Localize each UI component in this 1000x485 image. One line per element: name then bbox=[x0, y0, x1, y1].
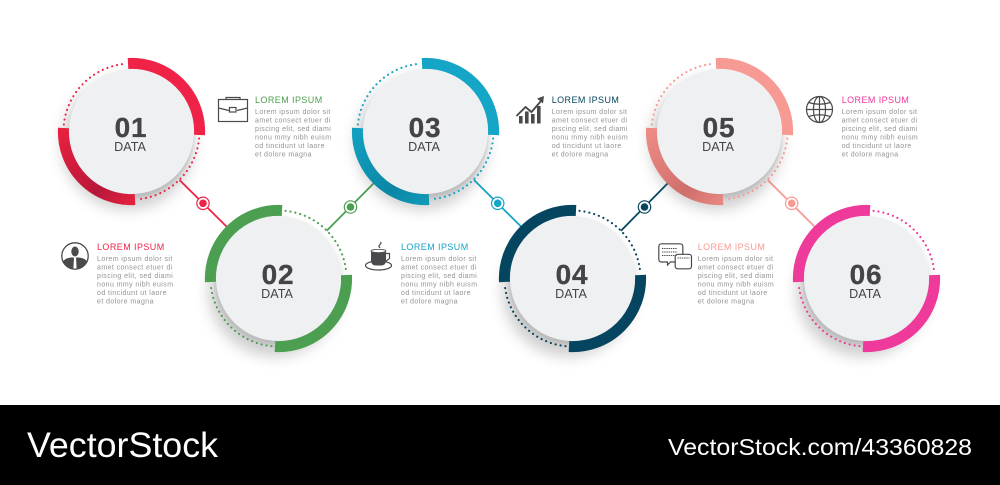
text block: step 01: piscing elit, sed diami bbox=[255, 126, 331, 133]
text block: step 04: amet consect etuer di bbox=[401, 264, 477, 272]
text block: step 03: amet consect etuer di bbox=[552, 118, 627, 125]
text block: step 03: Lorem ipsum dolor sit bbox=[552, 109, 627, 116]
circle step 03: DATA bbox=[408, 140, 440, 154]
text block: step 06: et dolore magna bbox=[698, 298, 755, 306]
icon: chat bubbles bbox=[659, 244, 692, 269]
text block: step 05 bbox=[842, 95, 918, 159]
circle step 06 bbox=[796, 210, 935, 356]
text block: step 02: Lorem ipsum dolor sit bbox=[97, 256, 173, 263]
text block: step 02: piscing elit, sed diami bbox=[97, 273, 173, 280]
circle step 01 bbox=[62, 63, 200, 209]
icon: coffee cup bbox=[366, 242, 392, 270]
circle step 02: DATA bbox=[261, 287, 293, 301]
connector: 05 to 06 bbox=[768, 180, 815, 227]
icon: globe bbox=[806, 96, 832, 122]
text block: step 06: amet consect etuer di bbox=[698, 264, 773, 272]
text block: step 06: Lorem ipsum dolor sit bbox=[698, 256, 773, 263]
circle step 02: 02 bbox=[262, 259, 294, 290]
text block: step 03 bbox=[552, 95, 628, 159]
text block: step 05: od tincidunt ut laore bbox=[842, 143, 912, 150]
text block: step 04: od tincidunt ut laore bbox=[401, 290, 471, 297]
connector: 01 to 02 bbox=[180, 180, 227, 227]
circle step 06: 06 bbox=[850, 259, 882, 290]
text block: step 03: od tincidunt ut laore bbox=[552, 143, 622, 150]
text block: step 02: od tincidunt ut laore bbox=[97, 290, 167, 297]
text block: step 04: LOREM IPSUM bbox=[401, 242, 469, 252]
text block: step 02 bbox=[97, 242, 173, 306]
text block: step 05: LOREM IPSUM bbox=[842, 95, 909, 105]
text block: step 04: nonu mmy nibh euism bbox=[401, 282, 477, 288]
text block: step 04: et dolore magna bbox=[401, 298, 458, 306]
connector: 03 to 04 bbox=[474, 180, 522, 227]
circle step 02 bbox=[208, 210, 347, 356]
icon: briefcase bbox=[218, 98, 248, 122]
circle step 05: 05 bbox=[703, 112, 735, 143]
circle step 03: 03 bbox=[409, 112, 441, 143]
circle step 01: 01 bbox=[115, 112, 147, 143]
circle step 03 bbox=[356, 63, 494, 209]
text block: step 04 bbox=[401, 242, 477, 306]
text block: step 05: amet consect etuer di bbox=[842, 118, 917, 125]
text block: step 01: amet consect etuer di bbox=[255, 118, 331, 125]
text block: step 02: et dolore magna bbox=[97, 298, 154, 306]
text block: step 05: et dolore magna bbox=[842, 152, 899, 159]
text block: step 01: et dolore magna bbox=[255, 152, 312, 159]
text block: step 06: LOREM IPSUM bbox=[698, 242, 765, 252]
icon: businessman bbox=[62, 243, 88, 269]
circle step 04 bbox=[502, 210, 641, 356]
text block: step 02: LOREM IPSUM bbox=[97, 242, 165, 252]
footer banner: VectorStock.com/43360828 bbox=[668, 434, 972, 460]
text block: step 03: nonu mmy nibh euism bbox=[552, 135, 628, 142]
text block: step 03: et dolore magna bbox=[552, 152, 609, 159]
text block: step 06: od tincidunt ut laore bbox=[698, 290, 768, 297]
text block: step 06: piscing elit, sed diami bbox=[698, 273, 774, 280]
text block: step 05: nonu mmy nibh euism bbox=[842, 135, 918, 142]
text block: step 06 bbox=[698, 242, 774, 306]
circle step 05: DATA bbox=[702, 140, 734, 154]
text block: step 03: LOREM IPSUM bbox=[552, 95, 619, 105]
text block: step 04: piscing elit, sed diami bbox=[401, 273, 477, 280]
footer banner bbox=[0, 405, 1000, 485]
footer banner: VectorStock bbox=[27, 426, 219, 465]
connector: 04 to 05 bbox=[621, 183, 668, 231]
text block: step 01: Lorem ipsum dolor sit bbox=[255, 109, 331, 116]
text block: step 01: nonu mmy nibh euism bbox=[255, 135, 331, 142]
text block: step 01: LOREM IPSUM bbox=[255, 95, 323, 105]
text block: step 05: Lorem ipsum dolor sit bbox=[842, 109, 917, 116]
circle step 04: 04 bbox=[556, 259, 588, 290]
text block: step 06: nonu mmy nibh euism bbox=[698, 282, 774, 288]
circle step 05 bbox=[650, 63, 788, 209]
text block: step 03: piscing elit, sed diami bbox=[552, 126, 628, 133]
icon: growth chart bbox=[516, 96, 544, 124]
text block: step 02: amet consect etuer di bbox=[97, 264, 173, 272]
text block: step 04: Lorem ipsum dolor sit bbox=[401, 256, 477, 263]
text block: step 02: nonu mmy nibh euism bbox=[97, 282, 173, 288]
circle step 04: DATA bbox=[555, 287, 587, 301]
text block: step 05: piscing elit, sed diami bbox=[842, 126, 918, 133]
text block: step 01: od tincidunt ut laore bbox=[255, 143, 325, 150]
circle step 01: DATA bbox=[114, 140, 146, 154]
circle step 06: DATA bbox=[849, 287, 881, 301]
connector: 02 to 03 bbox=[327, 183, 374, 231]
text block: step 01 bbox=[255, 95, 331, 159]
